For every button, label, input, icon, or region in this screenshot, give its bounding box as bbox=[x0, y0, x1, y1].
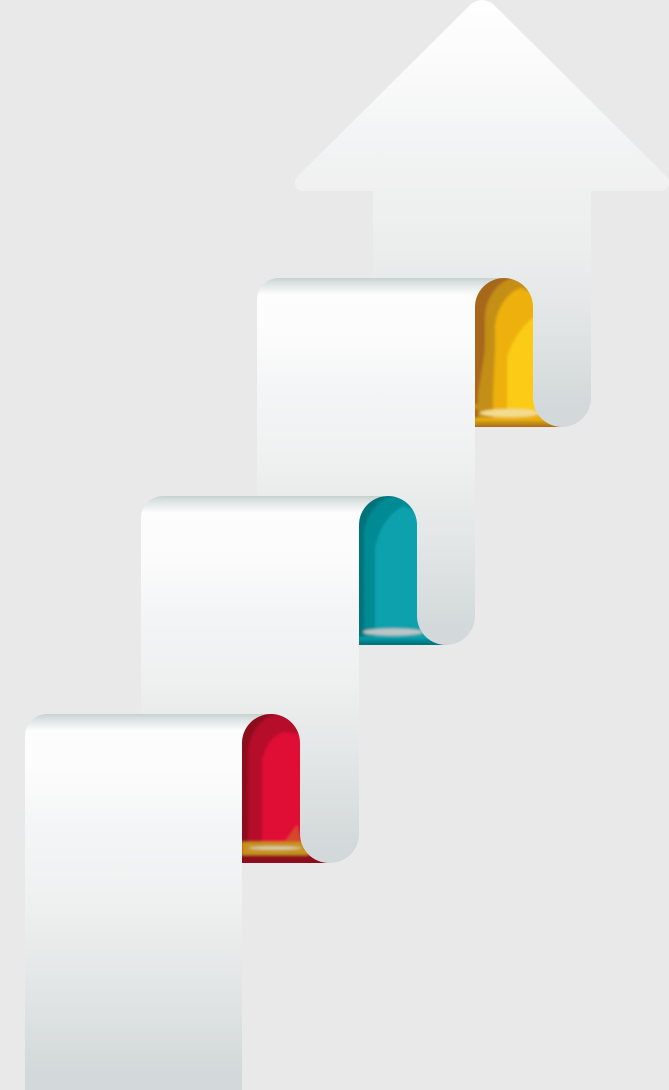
arrow head and shaft bbox=[295, 0, 669, 427]
red fold bbox=[242, 714, 328, 863]
sheet: front step bbox=[25, 714, 268, 1090]
teal fold bbox=[359, 496, 446, 645]
yellow fold bbox=[475, 278, 562, 427]
sheet: upper step bbox=[257, 278, 500, 645]
sheet: middle step bbox=[141, 496, 384, 863]
